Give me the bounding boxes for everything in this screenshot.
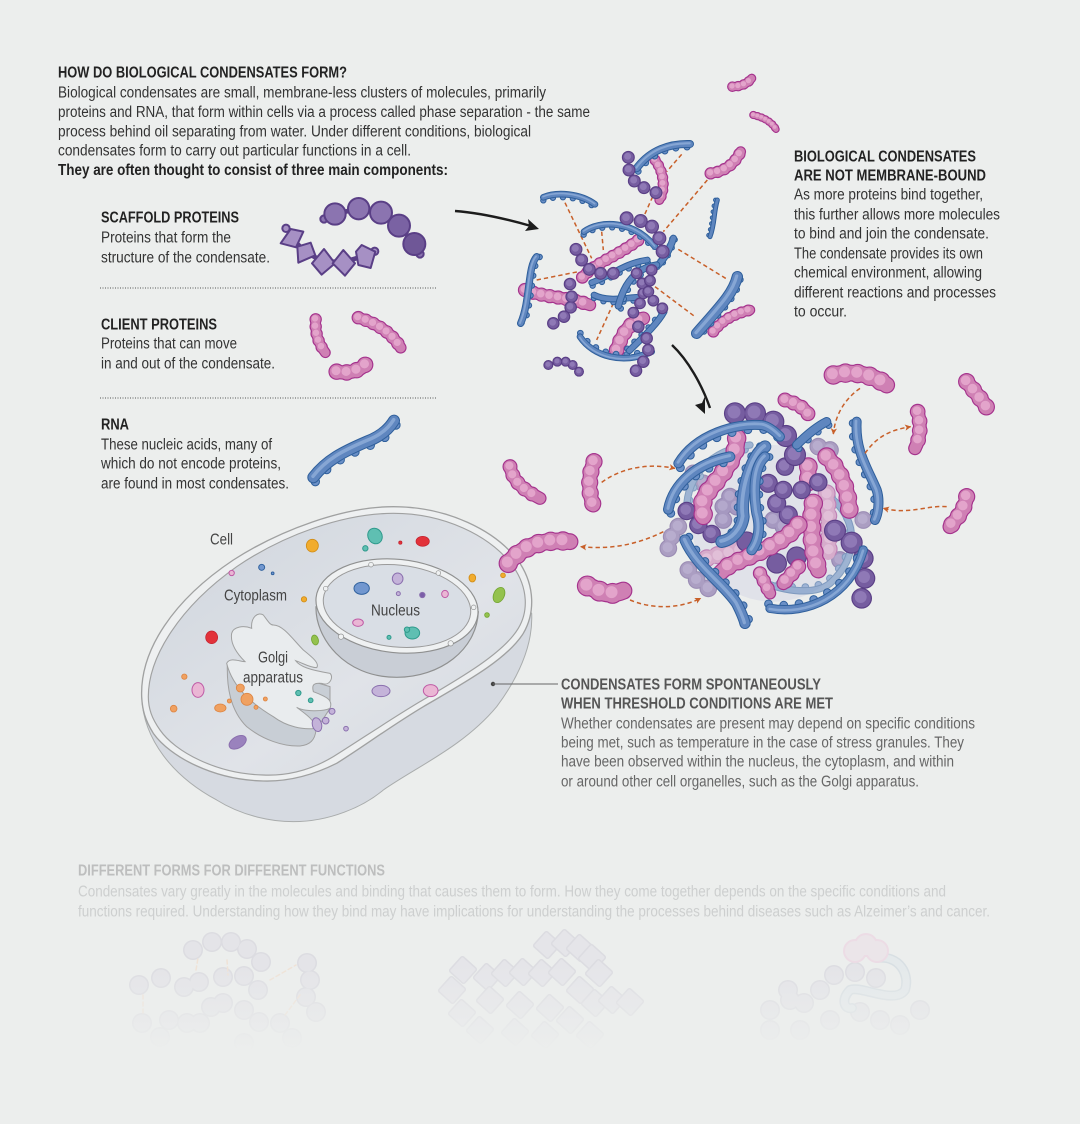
cell membrane rim	[142, 507, 532, 781]
legend: RNA text: These nucleic acids, many of	[101, 437, 273, 454]
icon: client protein chains	[315, 317, 401, 373]
text: biological condensates are not membrane-bound: The condensate provides its own	[794, 246, 983, 263]
intro text block: condensates form to carry out particular functions in a cell.	[58, 143, 411, 160]
condensates: teal	[296, 526, 420, 703]
nucleus	[311, 551, 483, 677]
illustration: cell	[142, 507, 532, 822]
legend: RNA text: are found in most condensates.	[101, 476, 289, 493]
condensates: lavender and purple	[227, 573, 425, 752]
free client proteins around condensate	[507, 372, 987, 594]
labels inside the cell: Nucleus	[371, 603, 420, 620]
labels inside the cell: Golgi	[258, 650, 288, 667]
client proteins in cluster	[524, 78, 776, 350]
cytoplasm floor	[148, 513, 525, 775]
condensates: red	[206, 536, 429, 644]
legend: scaffold proteins text: SCAFFOLD PROTEINS	[101, 210, 239, 227]
legend: client proteins text: Proteins that can move	[101, 336, 237, 353]
client proteins inside condensate	[701, 437, 849, 593]
arrow: assembly into cluster	[455, 211, 539, 231]
cell body wall	[142, 592, 532, 822]
text: biological condensates are not membrane-bound: this further allows more molecules	[794, 207, 1000, 224]
condensates: orange	[170, 674, 267, 712]
text: condensates form spontaneously: CONDENSATES FORM SPONTANEOUSLY	[561, 677, 822, 694]
scaffold proteins behind	[686, 482, 865, 598]
labels inside the cell: Cell	[210, 532, 233, 549]
condensates: pink	[192, 570, 448, 697]
text: condensates form spontaneously: Whether condensates are present may depend on specific conditions	[561, 716, 975, 733]
dotted divider	[100, 287, 437, 289]
condensates: yellow	[301, 539, 505, 602]
golgi apparatus	[227, 614, 332, 746]
intro text block: They are often thought to consist of three main components:	[58, 162, 448, 179]
text: biological condensates are not membrane-bound: different reactions and processes	[794, 285, 996, 302]
faded condensate type 3	[770, 945, 920, 1030]
faded molecules behind condensate	[668, 445, 863, 591]
intro text block: Biological condensates are small, membrane-less clusters of molecules, primarily	[58, 85, 546, 102]
icon: scaffold protein chains	[281, 198, 425, 276]
faded condensate type 1	[139, 942, 316, 1043]
text: biological condensates are not membrane-bound	[794, 149, 1000, 321]
fade-out overlay on lower illustrations	[100, 965, 980, 1080]
text: condensates form spontaneously: have been observed within the nucleus, the cytoplasm, and within	[561, 754, 954, 771]
legend: client proteins text	[101, 317, 275, 373]
labels inside the cell: apparatus	[243, 670, 303, 687]
text: different forms description	[78, 884, 990, 921]
heading: different forms for different functions: DIFFERENT FORMS FOR DIFFERENT FUNCTIONS	[78, 863, 385, 880]
text: biological condensates are not membrane-bound: BIOLOGICAL CONDENSATES	[794, 149, 976, 166]
dashed exchange arrows	[581, 388, 947, 607]
arrow: cluster maturing into condensate	[672, 345, 710, 414]
legend: RNA text: which do not encode proteins,	[100, 456, 281, 473]
text: condensates form spontaneously: or around other cell organelles, such as the Golgi apparatus.	[561, 774, 919, 791]
text: biological condensates are not membrane-bound: As more proteins bind together,	[794, 187, 983, 204]
legend: RNA text: RNA	[101, 417, 129, 434]
faded condensate type 2	[438, 929, 644, 1049]
RNA strands in cluster	[520, 143, 740, 359]
text: different forms description: Condensates vary greatly in the molecules and binding that causes them to form. How they come together depends on the specific conditions and	[78, 884, 946, 901]
text: biological condensates are not membrane-bound: to bind and join the condensate.	[794, 226, 989, 243]
text: condensates form spontaneously: being met, such as temperature in the case of stress granules. They	[561, 735, 964, 752]
intro text block: proteins and RNA, that form within cells via a process called phase separation - the same	[58, 104, 590, 121]
legend: client proteins text: CLIENT PROTEINS	[101, 317, 217, 334]
dotted divider	[100, 397, 437, 399]
text: biological condensates are not membrane-bound: ARE NOT MEMBRANE-BOUND	[794, 168, 986, 185]
dashed binding lines	[537, 154, 728, 340]
legend: RNA text	[100, 417, 289, 493]
legend: scaffold proteins text: structure of the condensate.	[101, 250, 270, 267]
legend: scaffold proteins text: Proteins that form the	[101, 230, 231, 247]
labels inside the cell	[210, 532, 420, 687]
illustration: molecules binding into a cluster	[520, 78, 776, 372]
condensates: blue	[259, 564, 369, 594]
intro text block	[58, 85, 590, 179]
RNA strands in condensate	[668, 421, 878, 623]
text: condensates form spontaneously: WHEN THRESHOLD CONDITIONS ARE MET	[561, 696, 833, 713]
scaffold proteins in cluster	[548, 156, 663, 372]
text: condensates form spontaneously	[561, 677, 975, 791]
legend: client proteins text: in and out of the condensate.	[101, 356, 275, 373]
heading: how do biological condensates form: HOW DO BIOLOGICAL CONDENSATES FORM?	[58, 65, 347, 82]
labels inside the cell: Cytoplasm	[224, 588, 287, 605]
condensates: green	[310, 585, 507, 646]
intro text block: process behind oil separating from water. Under different conditions, biological	[58, 124, 531, 141]
condensate interior haze	[692, 445, 855, 602]
leader line from cell to caption	[491, 682, 558, 686]
scaffold proteins in front	[734, 412, 852, 543]
icon: RNA strand	[313, 420, 396, 482]
illustration: mature condensate with exchange arrows	[507, 372, 987, 623]
text: biological condensates are not membrane-bound: to occur.	[794, 304, 847, 321]
legend: scaffold proteins text	[101, 210, 270, 267]
text: biological condensates are not membrane-bound: chemical environment, allowing	[794, 265, 982, 282]
